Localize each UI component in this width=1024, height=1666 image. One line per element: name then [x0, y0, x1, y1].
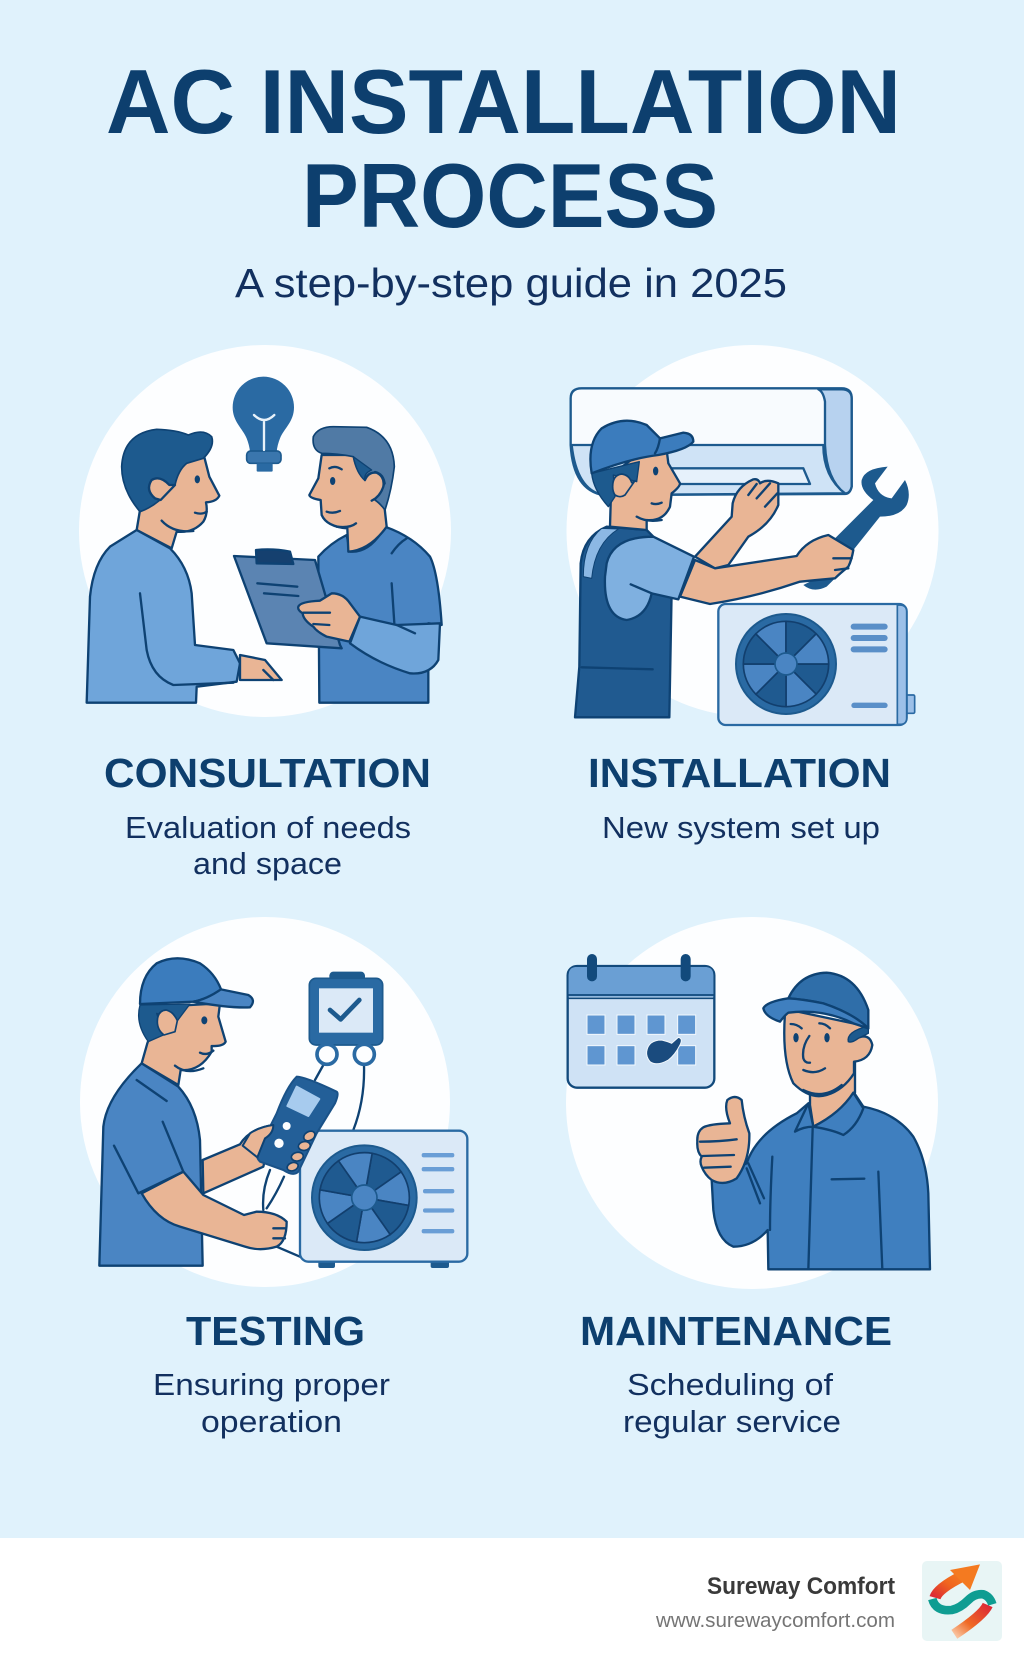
- background circle: [79, 345, 451, 717]
- panel: maintenance: [566, 917, 938, 1289]
- technician: [712, 973, 930, 1269]
- background circle: [566, 345, 938, 717]
- icon: thumbs-up hand: [697, 1097, 749, 1183]
- background circle: [566, 917, 938, 1289]
- technician: [575, 421, 853, 717]
- label: maintenance: [580, 1308, 892, 1439]
- footer url: www.surewaycomfort.com: [655, 1610, 895, 1632]
- illustration: technician testing unit: [99, 958, 467, 1268]
- illustration: two men with clipboard and light bulb: [87, 377, 442, 703]
- indoor AC unit: [571, 388, 852, 495]
- title: [106, 52, 901, 247]
- technician: [99, 958, 287, 1266]
- background circle: [80, 917, 450, 1287]
- label: testing: TESTING: [186, 1308, 365, 1354]
- title: AC INSTALLATION: [106, 52, 901, 153]
- label: consultation: CONSULTATION: [104, 750, 431, 796]
- handheld meter: [243, 1077, 338, 1174]
- outdoor AC unit: [300, 1131, 467, 1268]
- icon: light bulb: [233, 377, 294, 472]
- label: maintenance: regular service: [623, 1404, 841, 1439]
- forearm and hand: [298, 593, 440, 673]
- hoses: [263, 1065, 364, 1257]
- icon: wrench: [803, 467, 909, 590]
- illustration: technician installing AC: [571, 388, 915, 725]
- subtitle: A step-by-step guide in 2025: [235, 260, 787, 306]
- label: consultation: Evaluation of needs: [125, 810, 411, 845]
- fan: [309, 1143, 419, 1253]
- label: consultation: and space: [193, 846, 342, 881]
- label: installation: New system set up: [602, 810, 880, 845]
- right man: [309, 427, 442, 703]
- footer: [0, 1538, 1024, 1666]
- outdoor AC unit: [718, 604, 915, 725]
- label: testing: [153, 1308, 390, 1439]
- label: installation: [588, 750, 891, 845]
- panel: installation: [566, 345, 938, 725]
- left man: [87, 429, 282, 703]
- panel: consultation: [79, 345, 451, 717]
- illustration: calendar and thumbs-up technician: [568, 954, 930, 1269]
- title: PROCESS: [302, 146, 718, 247]
- label: maintenance: Scheduling of: [627, 1367, 833, 1402]
- icon: calendar: [568, 954, 714, 1088]
- label: testing: operation: [201, 1404, 342, 1439]
- clipboard: [234, 549, 342, 648]
- label: testing: Ensuring proper: [153, 1367, 390, 1402]
- label: consultation: [104, 750, 431, 881]
- logo: [922, 1561, 1002, 1641]
- fan: [734, 612, 837, 715]
- label: maintenance: MAINTENANCE: [580, 1308, 892, 1354]
- panel: testing: [80, 917, 467, 1287]
- footer brand name: Sureway Comfort: [707, 1573, 895, 1600]
- label: installation: INSTALLATION: [588, 750, 891, 796]
- gauge manifold: [309, 972, 383, 1064]
